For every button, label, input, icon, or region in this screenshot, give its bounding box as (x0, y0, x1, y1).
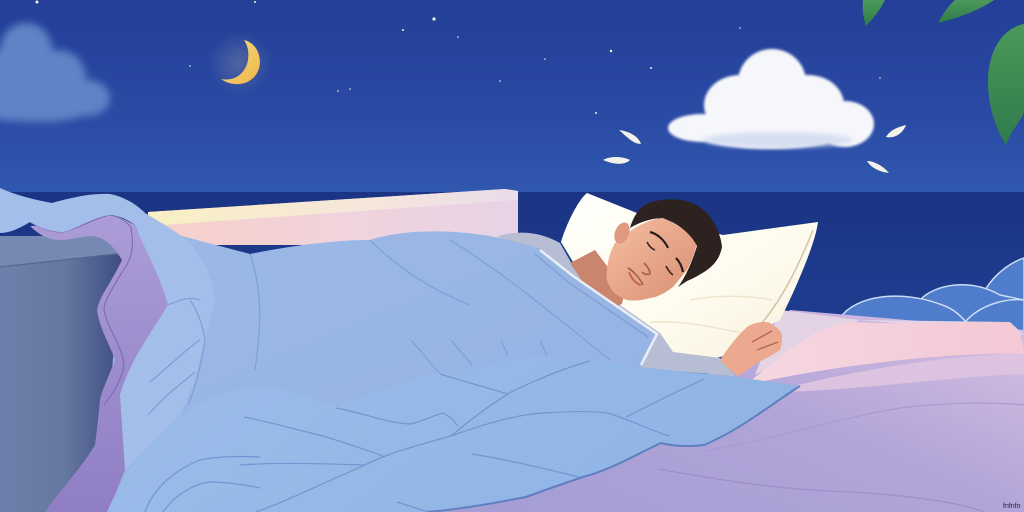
headboard wall (148, 189, 518, 245)
duvet fold over headboard (0, 188, 215, 470)
main duvet over body (100, 225, 780, 512)
nose and mouth (628, 263, 650, 285)
foreground duvet pile (107, 356, 800, 512)
closed eyes (647, 242, 673, 275)
stars (36, 0, 881, 114)
bed side block (0, 236, 130, 512)
mattress sheet (420, 310, 1024, 512)
cloud: bright centre (668, 49, 874, 149)
pillow (561, 193, 818, 362)
moon (208, 31, 272, 95)
hair (630, 199, 722, 287)
lavender duvet underside (30, 212, 168, 512)
distant stylised waves (840, 258, 1024, 335)
sea horizon (0, 192, 1024, 342)
arm and hand (720, 322, 782, 376)
duvet trim (540, 250, 657, 365)
birds (603, 125, 906, 173)
ear (611, 220, 633, 246)
cloud: left dim (0, 23, 110, 122)
face (606, 218, 697, 301)
night sky background (0, 0, 1024, 193)
eyebrows (650, 232, 683, 272)
sleeping man (498, 199, 782, 376)
watermark: fnfnfn (1003, 503, 1021, 510)
leaves (863, 0, 1024, 145)
pyjama shoulder and sleeve (498, 233, 735, 376)
neck and chest (570, 250, 625, 307)
